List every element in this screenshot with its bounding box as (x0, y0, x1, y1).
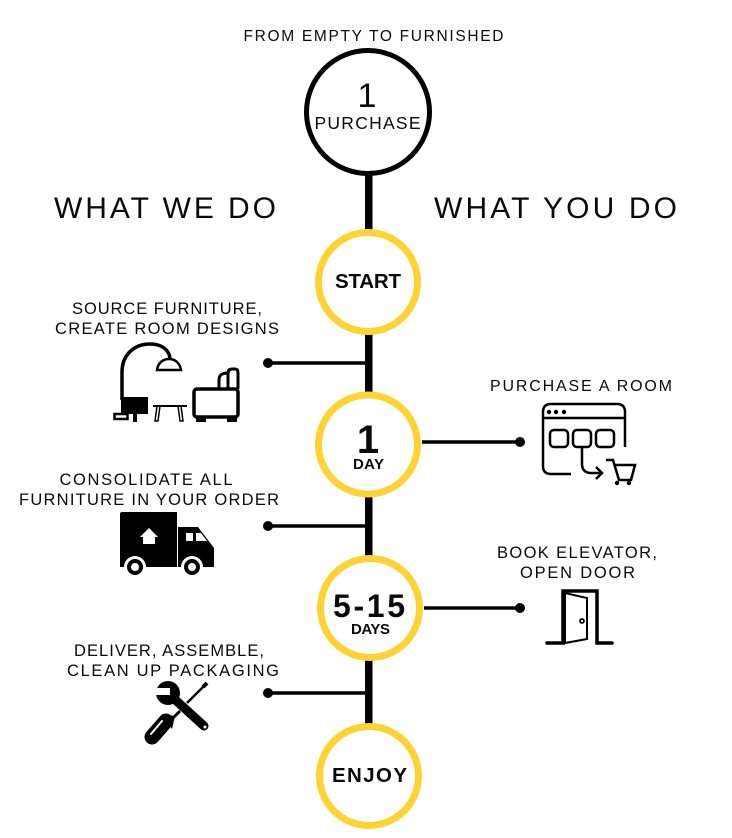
text: deliver: DELIVER, ASSEMBLE, (74, 642, 264, 660)
step: start (318, 232, 418, 332)
heading: what we do: WHAT WE DO (54, 192, 276, 225)
text: book elevator: OPEN DOOR (520, 564, 635, 582)
step: purchase: 1 (358, 77, 376, 115)
step: 5-15 days: DAYS (351, 621, 390, 638)
connector: deliver (263, 688, 366, 698)
connector: book elevator (424, 603, 525, 613)
step: 5-15 days (320, 558, 420, 658)
connector: consolidate (263, 521, 366, 531)
step: 1 day: 1 (357, 418, 379, 462)
connector: purchase a room (422, 437, 525, 447)
text: source furniture (55, 300, 279, 338)
connector: source furniture (263, 358, 366, 368)
text: purchase a room: PURCHASE A ROOM (490, 378, 672, 395)
icon: lamp, table and armchair (114, 344, 238, 422)
step: enjoy (320, 726, 418, 826)
timeline spine (365, 170, 372, 770)
step: 1 day: DAY (353, 456, 384, 473)
text: consolidate (19, 471, 279, 509)
title: FROM EMPTY TO FURNISHED (244, 28, 504, 45)
icon: wrench and screwdriver (151, 681, 207, 737)
icon: browser window with cart (543, 404, 635, 485)
step: enjoy: ENJOY (332, 764, 407, 787)
text: consolidate: CONSOLIDATE ALL (60, 471, 232, 489)
step: 5-15 days: 5-15 (333, 588, 405, 624)
text: consolidate: FURNITURE IN YOUR ORDER (19, 491, 279, 509)
step: purchase (306, 50, 430, 174)
text: book elevator (497, 544, 657, 582)
text: source furniture: SOURCE FURNITURE, (72, 300, 262, 318)
text: source furniture: CREATE ROOM DESIGNS (55, 320, 279, 338)
text: deliver: CLEAN UP PACKAGING (67, 662, 279, 680)
text: deliver (67, 642, 279, 680)
step: purchase: PURCHASE (314, 113, 420, 133)
heading: what you do: WHAT YOU DO (434, 192, 677, 225)
text: book elevator: BOOK ELEVATOR, (497, 544, 657, 562)
step: start: START (335, 270, 401, 293)
icon: open door (547, 591, 612, 643)
icon: delivery truck (120, 512, 214, 578)
step: 1 day (318, 395, 418, 494)
